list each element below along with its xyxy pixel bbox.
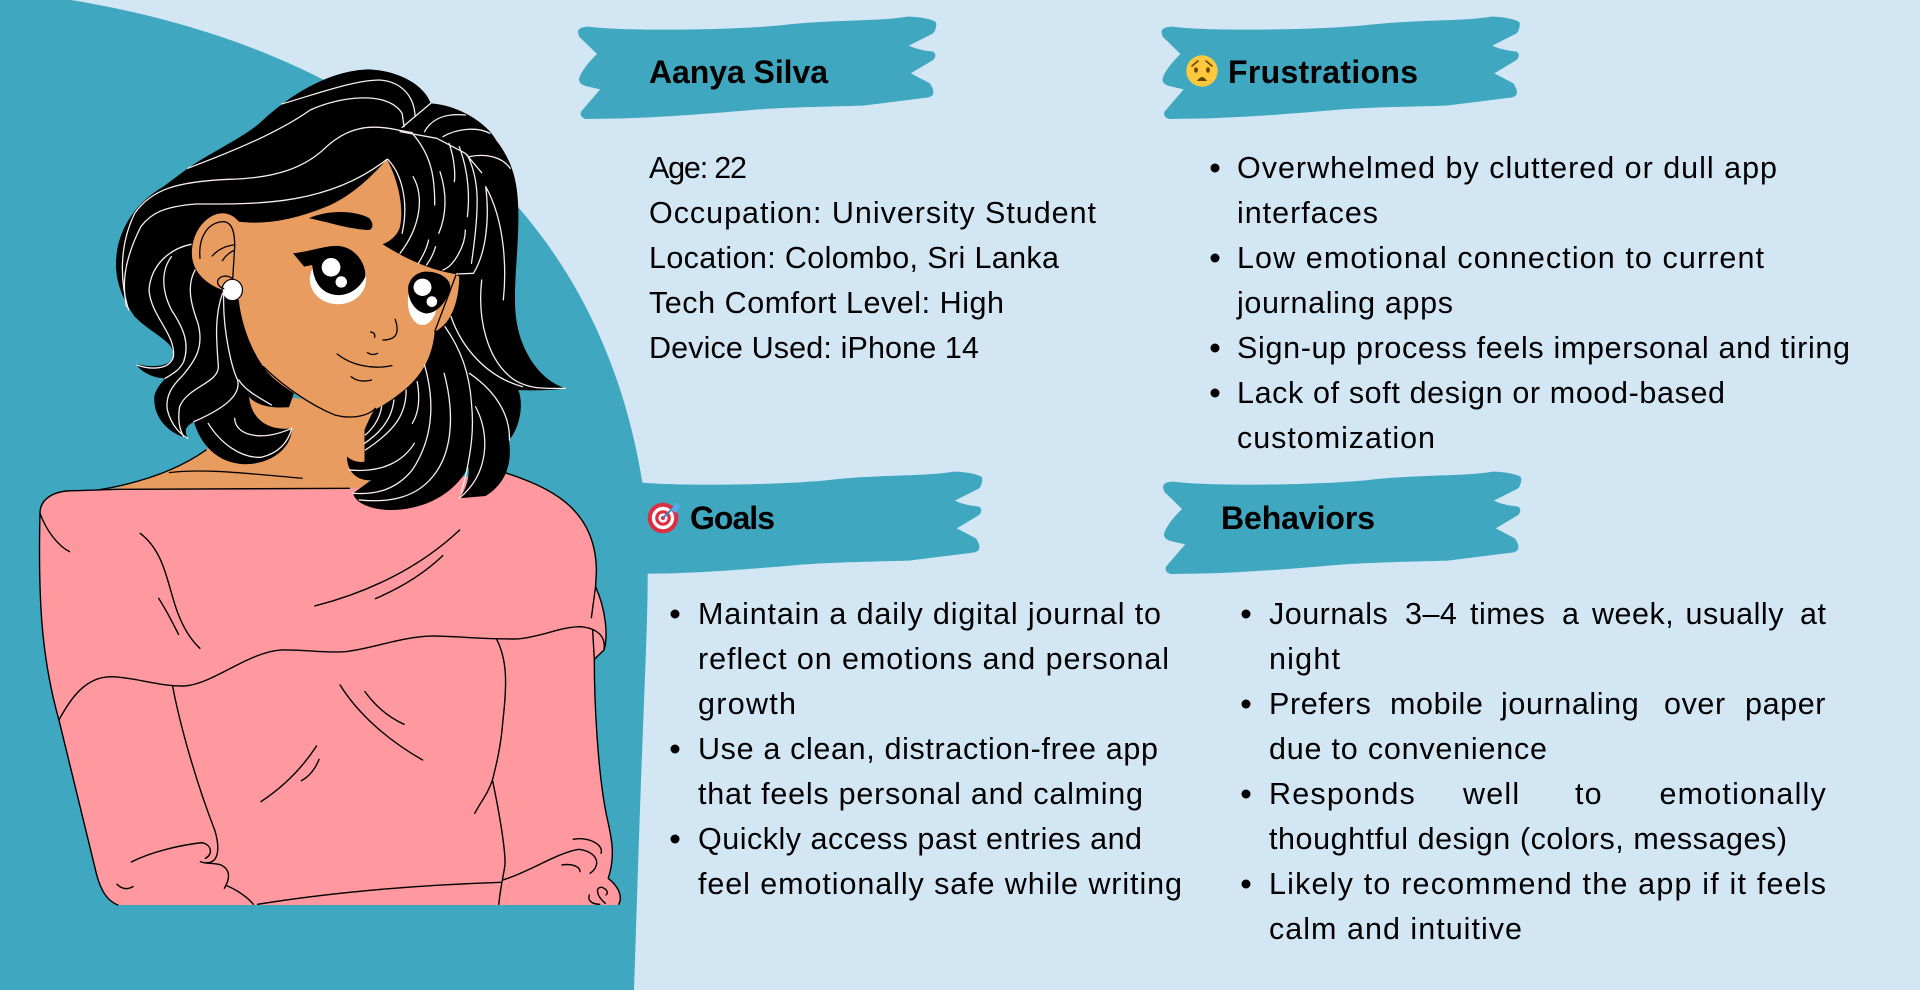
- frustrations bullet list: customization: [1237, 421, 1435, 455]
- behaviors bullet list: paper: [1745, 687, 1826, 721]
- heading banner: Frustrations: [1161, 17, 1520, 119]
- heading banner: Behaviors: [1163, 472, 1521, 574]
- heading banner: Aanya Silva: [578, 17, 936, 119]
- behaviors bullet list: times: [1470, 597, 1545, 631]
- heading banner: Aanya Silva: Aanya Silva: [649, 54, 828, 90]
- behaviors bullet list: usually: [1686, 597, 1784, 631]
- hair silhouette: [116, 69, 565, 510]
- heading banner: Frustrations: Frustrations: [1228, 54, 1418, 90]
- head, hair and face: [98, 69, 565, 510]
- goals bullet list: Use a clean, distraction-free app: [698, 732, 1158, 766]
- profile details text: Device Used: iPhone 14: [649, 331, 979, 365]
- profile details text: Occupation: University Student: [649, 196, 1097, 230]
- profile details text: Tech Comfort Level: High: [649, 286, 1004, 320]
- illustration: young woman portrait: [39, 69, 620, 905]
- face line details: [98, 222, 456, 490]
- behaviors bullet list: a: [1562, 597, 1579, 631]
- teal curved background shape: [0, 0, 648, 990]
- goals bullet list: growth: [698, 687, 796, 721]
- frustrations bullet list: interfaces: [1237, 196, 1378, 230]
- goals bullet list: [670, 597, 1182, 901]
- goals bullet list: that feels personal and calming: [698, 777, 1143, 811]
- profile details text: Age: 22: [649, 151, 747, 185]
- frustrations bullet list: Lack of soft design or mood-based: [1237, 376, 1725, 410]
- goals bullet list: reflect on emotions and personal: [698, 642, 1169, 676]
- behaviors bullet list: Likely to recommend the app if it feels: [1269, 867, 1826, 901]
- heading banner: Behaviors: Behaviors: [1221, 500, 1375, 536]
- heading banner: Goals: Goals: [690, 500, 775, 536]
- frustrations bullet list: journaling apps: [1236, 286, 1453, 320]
- frustrations bullet list: Sign-up process feels impersonal and tiring: [1237, 331, 1850, 365]
- behaviors bullet list: [1242, 597, 1827, 946]
- behaviors bullet list: calm and intuitive: [1269, 912, 1522, 946]
- behaviors bullet list: mobile: [1390, 687, 1483, 721]
- behaviors bullet list: thoughtful design (colors, messages): [1269, 822, 1787, 856]
- hair strands: [122, 80, 565, 501]
- goals bullet list: Quickly access past entries and: [698, 822, 1142, 856]
- behaviors bullet list: Responds: [1269, 777, 1416, 811]
- behaviors bullet list: 3–4: [1405, 597, 1457, 631]
- goals bullet list: Maintain a daily digital journal to: [698, 597, 1161, 631]
- frustrations bullet list: Low emotional connection to current: [1237, 241, 1765, 275]
- earring: [222, 279, 242, 301]
- eyebrow: [309, 212, 372, 230]
- goals bullet list: feel emotionally safe while writing: [698, 867, 1182, 901]
- pink sweater: [39, 473, 620, 905]
- behaviors bullet list: Prefers: [1269, 687, 1372, 721]
- frustrations bullet list: Overwhelmed by cluttered or dull app: [1237, 151, 1777, 185]
- right eye: [408, 272, 450, 325]
- face skin: [192, 159, 459, 417]
- neck and shoulders: [98, 393, 376, 493]
- behaviors bullet list: week,: [1591, 597, 1674, 631]
- heading banner: Goals: [624, 472, 982, 574]
- behaviors bullet list: to: [1575, 777, 1603, 811]
- behaviors bullet list: emotionally: [1660, 777, 1827, 811]
- icon: worried face: [1186, 55, 1218, 87]
- frustrations bullet list: [1210, 151, 1850, 455]
- left eye: [293, 246, 366, 304]
- behaviors bullet list: well: [1462, 777, 1520, 811]
- behaviors bullet list: night: [1269, 642, 1341, 676]
- behaviors bullet list: due to convenience: [1269, 732, 1547, 766]
- profile details text: [649, 151, 1097, 365]
- behaviors bullet list: journaling: [1500, 687, 1639, 721]
- behaviors bullet list: at: [1800, 597, 1826, 631]
- behaviors bullet list: over: [1664, 687, 1726, 721]
- profile details text: Location: Colombo, Sri Lanka: [649, 241, 1059, 275]
- behaviors bullet list: Journals: [1269, 597, 1388, 631]
- icon: target with dart: [648, 502, 680, 533]
